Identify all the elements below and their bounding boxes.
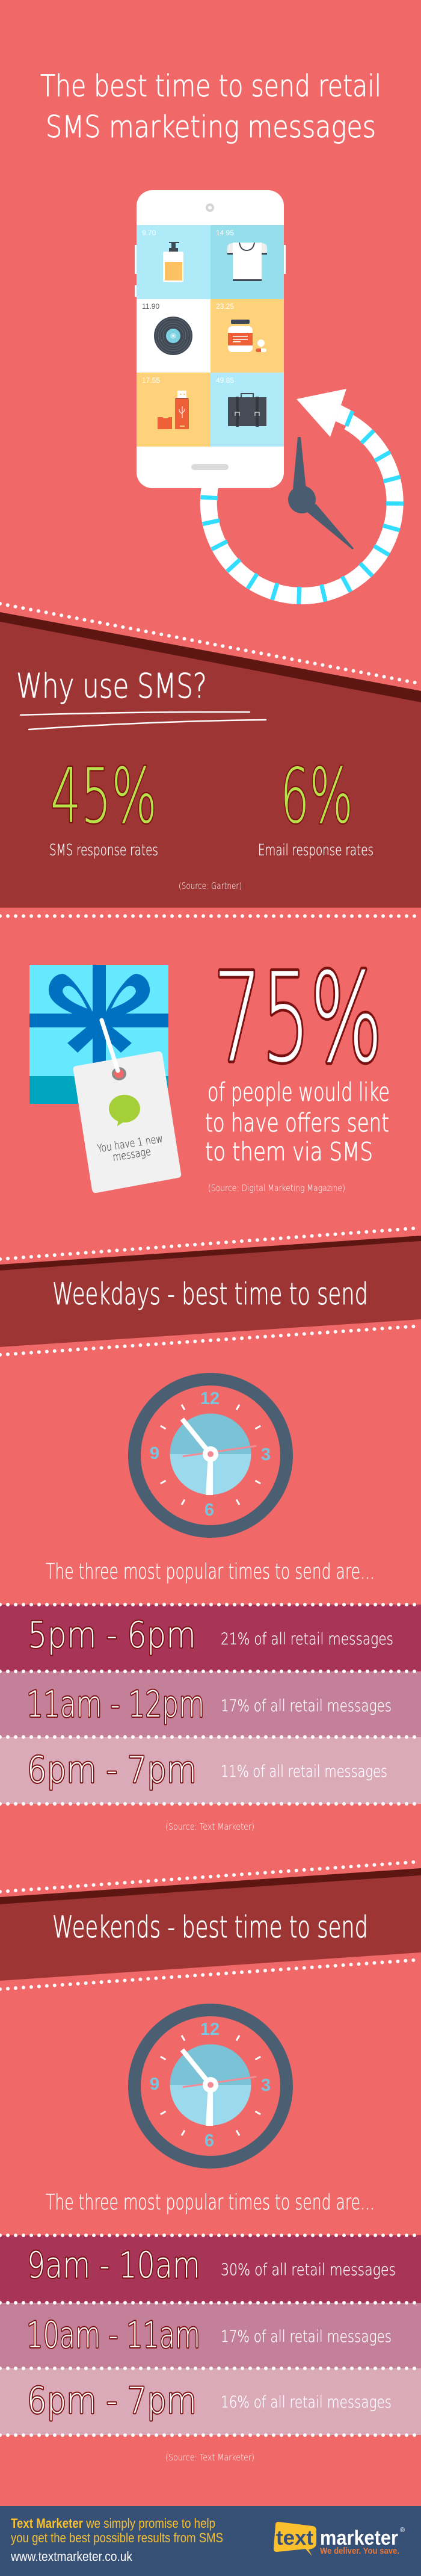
row: 9am to 10am	[0, 2235, 421, 2303]
row: 6pm to 7pm	[0, 1737, 421, 1804]
icon: gift box with tag	[29, 965, 181, 1193]
stat: 75 percent	[205, 947, 390, 1194]
cell: briefcase 49.85	[210, 373, 284, 447]
footer: you get the best possible results from SMS	[11, 2530, 223, 2545]
icon: weekday clock: 9	[150, 1444, 159, 1463]
row: 11am to 12pm: 11am - 12pm	[26, 1683, 204, 1726]
banner: weekdays	[0, 1228, 421, 1355]
heading: why use SMS	[16, 667, 266, 729]
icon: gift box with tag: You have 1 new	[96, 1133, 164, 1155]
cell: record 11.90: 11.90	[142, 302, 159, 311]
row: 6pm to 7pm weekend	[0, 2368, 421, 2435]
logo: Text Marketer: text	[276, 2527, 313, 2550]
icon: weekend clock: 9	[150, 2075, 159, 2094]
stat: SMS response rate	[49, 752, 158, 859]
title: SMS marketing messages	[46, 110, 376, 144]
logo: Text Marketer: marketer	[320, 2527, 398, 2550]
cell: briefcase 49.85: 49.85	[216, 376, 234, 385]
row: 10am to 11am	[0, 2303, 421, 2368]
title	[40, 69, 381, 144]
cell: soap 9.70	[137, 225, 210, 299]
icon: weekday clock: 3	[261, 1445, 271, 1464]
row: 10am to 11am: 10am - 11am	[26, 2314, 200, 2356]
banner: weekends	[0, 1862, 421, 1989]
source: Gartner: (Source: Gartner)	[179, 881, 242, 891]
row: 11am to 12pm	[0, 1671, 421, 1737]
icon: weekday clock: 6	[204, 1500, 214, 1520]
cell: soap 9.70: 9.70	[142, 229, 156, 237]
cell: pills 23.25: 23.25	[216, 302, 234, 311]
footer promise text: Text Marketer we simply promise to help	[11, 2516, 215, 2531]
cell: record 11.90	[137, 299, 210, 373]
stat: SMS response rate: 45%	[51, 752, 157, 840]
phone	[135, 190, 286, 488]
logo: Text Marketer: We deliver. You save.	[320, 2546, 399, 2556]
icon: weekend clock	[135, 2010, 286, 2162]
cell: t-shirt 14.95	[210, 225, 284, 299]
row: 5pm to 6pm	[0, 1605, 421, 1671]
panel: why use SMS	[0, 604, 421, 908]
cell: usb drive 17.55: 17.55	[142, 376, 160, 385]
source: Digital Marketing Magazine: (Source: Digital Marketing Magazine)	[208, 1183, 345, 1194]
stat: SMS response rate: SMS response rates	[49, 841, 158, 859]
stat: email response rate: 6%	[280, 752, 353, 840]
cell: pills 23.25	[210, 299, 284, 373]
stat: email response rate	[258, 752, 373, 859]
source: Text Marketer weekends: (Source: Text Marketer)	[165, 2452, 254, 2463]
footer	[0, 2506, 421, 2576]
icon: weekend clock: 6	[204, 2131, 214, 2150]
cell: usb drive 17.55	[137, 373, 210, 447]
row: 5pm to 6pm: 5pm - 6pm	[28, 1614, 196, 1656]
footer url: www.textmarketer.co.uk	[10, 2549, 133, 2564]
stat: 75 percent: to them via SMS	[205, 1137, 373, 1166]
logo: Text Marketer	[274, 2522, 405, 2556]
icon: weekend clock: 12	[200, 2020, 220, 2039]
logo: Text Marketer: ®	[400, 2527, 405, 2534]
row: 6pm to 7pm: 6pm - 7pm	[27, 1749, 197, 1791]
row: 6pm to 7pm weekend: 6pm - 7pm	[27, 2380, 197, 2422]
heading: why use SMS: Why use SMS?	[16, 667, 207, 706]
icon: circular clock arrow	[200, 389, 404, 604]
icon: weekday clock	[135, 1379, 286, 1531]
stat: email response rate: Email response rates	[258, 841, 373, 859]
icon: gift box with tag: message	[112, 1145, 152, 1164]
cell: t-shirt 14.95: 14.95	[216, 229, 234, 237]
icon: weekday clock: 12	[200, 1389, 220, 1408]
row: 9am to 10am: 9am - 10am	[27, 2244, 200, 2287]
icon: weekend clock: 3	[261, 2076, 271, 2095]
source: Text Marketer weekdays: (Source: Text Marketer)	[165, 1821, 254, 1832]
